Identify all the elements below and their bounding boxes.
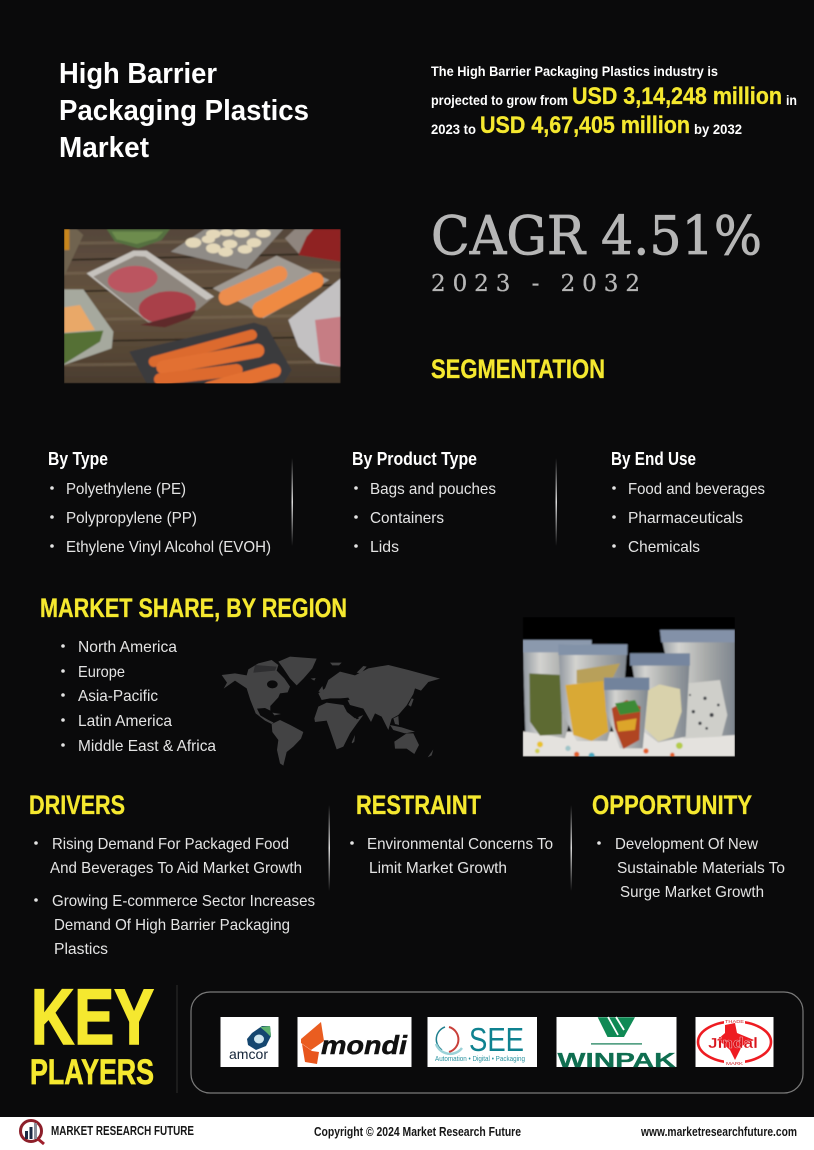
panel: opportunity: [592, 790, 785, 901]
CAGR figure: CAGR 4.51%: [431, 206, 762, 267]
market size statement: The High Barrier Packaging Plastics industry is: [431, 63, 718, 79]
segment list: by product type: By Product Type: [352, 449, 477, 469]
logo: SEE: Automation • Digital • Packaging: [435, 1054, 525, 1063]
logo: amcor: [220, 1017, 278, 1067]
logo: SEE: [428, 1017, 537, 1067]
region list: Latin America: [78, 713, 172, 730]
heading: key players: [30, 972, 154, 1092]
market size statement: USD 3,14,248 million: [572, 83, 782, 110]
region list: [61, 639, 216, 755]
logo: Jindal: MARK: [726, 1061, 743, 1066]
market size statement: 2023 to: [431, 121, 476, 137]
market size statement: projected to grow from: [431, 92, 568, 108]
CAGR figure: 2023 - 2032: [431, 271, 640, 297]
footer bar: [0, 1117, 814, 1150]
region list: Asia-Pacific: [78, 688, 158, 705]
segment list: by product type: [352, 449, 496, 556]
segment list: by product type: Lids: [370, 539, 399, 556]
photo: stand-up pouches: [523, 617, 735, 759]
world map: [222, 657, 440, 766]
segment list: by end use: Food and beverages: [628, 481, 765, 498]
photo: packaged food on wooden table: [64, 229, 341, 388]
segment list: by type: Ethylene Vinyl Alcohol (EVOH): [66, 539, 271, 556]
market size statement: by 2032: [694, 121, 742, 137]
segment list: by type: [48, 449, 271, 556]
market size statement: [431, 63, 797, 139]
logo: market research future: [20, 1120, 194, 1144]
heading: key players: KEY: [31, 972, 154, 1061]
title: Packaging Plastics: [59, 95, 309, 127]
heading: market share by region: MARKET SHARE, BY REGION: [40, 593, 347, 623]
logo: Winpak: [556, 1017, 676, 1072]
panel: restraint: Limit Market Growth: [369, 860, 507, 877]
logo: SEE: SEE: [469, 1021, 524, 1058]
region list: North America: [78, 639, 177, 656]
logo: market research future: MARKET RESEARCH FUTURE: [51, 1124, 194, 1138]
logo: Jindal: THADE: [725, 1019, 744, 1024]
title: [59, 58, 309, 164]
logo: mondi: mondi: [321, 1030, 408, 1060]
heading: key players: PLAYERS: [30, 1053, 154, 1092]
logo: mondi: [298, 1017, 412, 1067]
title: Market: [59, 132, 149, 164]
logo: Winpak: WINPAK: [558, 1049, 676, 1072]
segment list: by type: By Type: [48, 449, 108, 469]
market size statement: in: [786, 92, 797, 108]
panel: opportunity: Development Of New: [615, 836, 758, 853]
panel: drivers: [29, 790, 315, 958]
panel: drivers: And Beverages To Aid Market Growth: [50, 860, 302, 877]
copyright: Copyright © 2024 Market Research Future: [314, 1125, 521, 1139]
segment list: by end use: [611, 449, 765, 556]
panel: drivers: Growing E-commerce Sector Increases: [52, 893, 315, 910]
title: High Barrier: [59, 58, 217, 90]
logo: Jindal: [696, 1017, 774, 1067]
segment list: by product type: Containers: [370, 510, 444, 527]
panel: opportunity: OPPORTUNITY: [592, 790, 752, 820]
segment list: by end use: Pharmaceuticals: [628, 510, 743, 527]
panel: key player logos: [191, 992, 803, 1093]
panel: opportunity: Sustainable Materials To: [617, 860, 785, 877]
panel: drivers: DRIVERS: [29, 790, 125, 820]
panel: restraint: [350, 790, 553, 877]
region list: Europe: [78, 664, 125, 681]
CAGR figure: [431, 206, 762, 297]
panel: drivers: Rising Demand For Packaged Food: [52, 836, 289, 853]
segment list: by end use: Chemicals: [628, 539, 700, 556]
segment list: by type: Polyethylene (PE): [66, 481, 186, 498]
logo: Jindal: Jindal: [708, 1035, 758, 1052]
panel: drivers: Demand Of High Barrier Packaging: [54, 917, 290, 934]
panel: opportunity: Surge Market Growth: [620, 884, 764, 901]
panel: drivers: Plastics: [54, 941, 108, 958]
panel: restraint: RESTRAINT: [356, 790, 481, 820]
panel: restraint: Environmental Concerns To: [367, 836, 553, 853]
logo: amcor: amcor: [229, 1046, 268, 1062]
segment list: by product type: Bags and pouches: [370, 481, 496, 498]
heading: segmentation: SEGMENTATION: [431, 354, 605, 384]
segment list: by end use: By End Use: [611, 449, 696, 469]
segment list: by type: Polypropylene (PP): [66, 510, 197, 527]
market size statement: USD 4,67,405 million: [480, 112, 690, 139]
region list: Middle East & Africa: [78, 738, 216, 755]
